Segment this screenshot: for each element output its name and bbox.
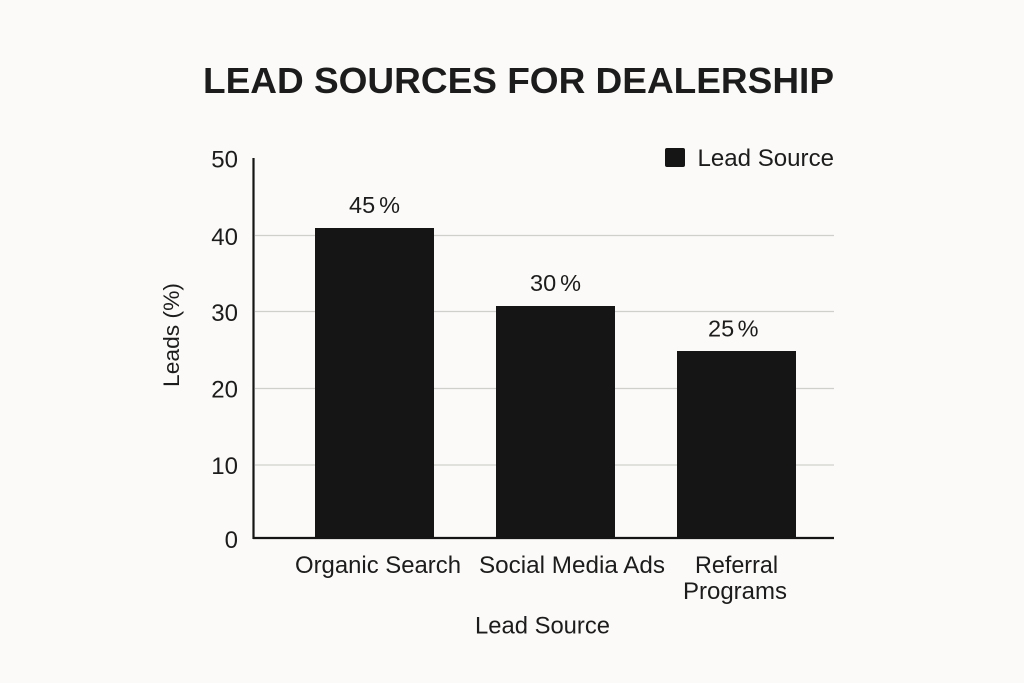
x axis category labels: Social Media Ads: [479, 552, 665, 579]
bar: Organic Search 45%: [315, 192, 434, 538]
y axis with ticks: 40: [211, 224, 238, 251]
title: LEAD SOURCES FOR DEALERSHIP: [203, 60, 834, 101]
x axis category labels: Programs: [683, 578, 787, 605]
y axis title: Leads (%): [159, 283, 184, 387]
bar: Social Media Ads 30%: [496, 270, 615, 538]
y axis with ticks: 50: [211, 146, 238, 174]
bar: Referral Programs 25%: [677, 316, 796, 538]
y axis with ticks: 0: [225, 527, 238, 554]
x axis: [253, 537, 834, 539]
x axis category labels: [295, 552, 787, 605]
bar: Organic Search 45%: 45 %: [349, 192, 400, 218]
x axis title: Lead Source: [475, 612, 610, 640]
y axis with ticks: [211, 146, 254, 554]
y axis with ticks: 10: [211, 453, 238, 480]
bar: Social Media Ads 30%: 30 %: [530, 270, 581, 296]
legend: Lead Source: [698, 145, 834, 172]
x axis category labels: Organic Search: [295, 552, 461, 579]
y axis with ticks: 30: [211, 300, 238, 327]
y axis with ticks: 20: [211, 376, 238, 404]
x axis category labels: Referral: [695, 552, 778, 579]
bar: Referral Programs 25%: 25 %: [708, 316, 759, 342]
